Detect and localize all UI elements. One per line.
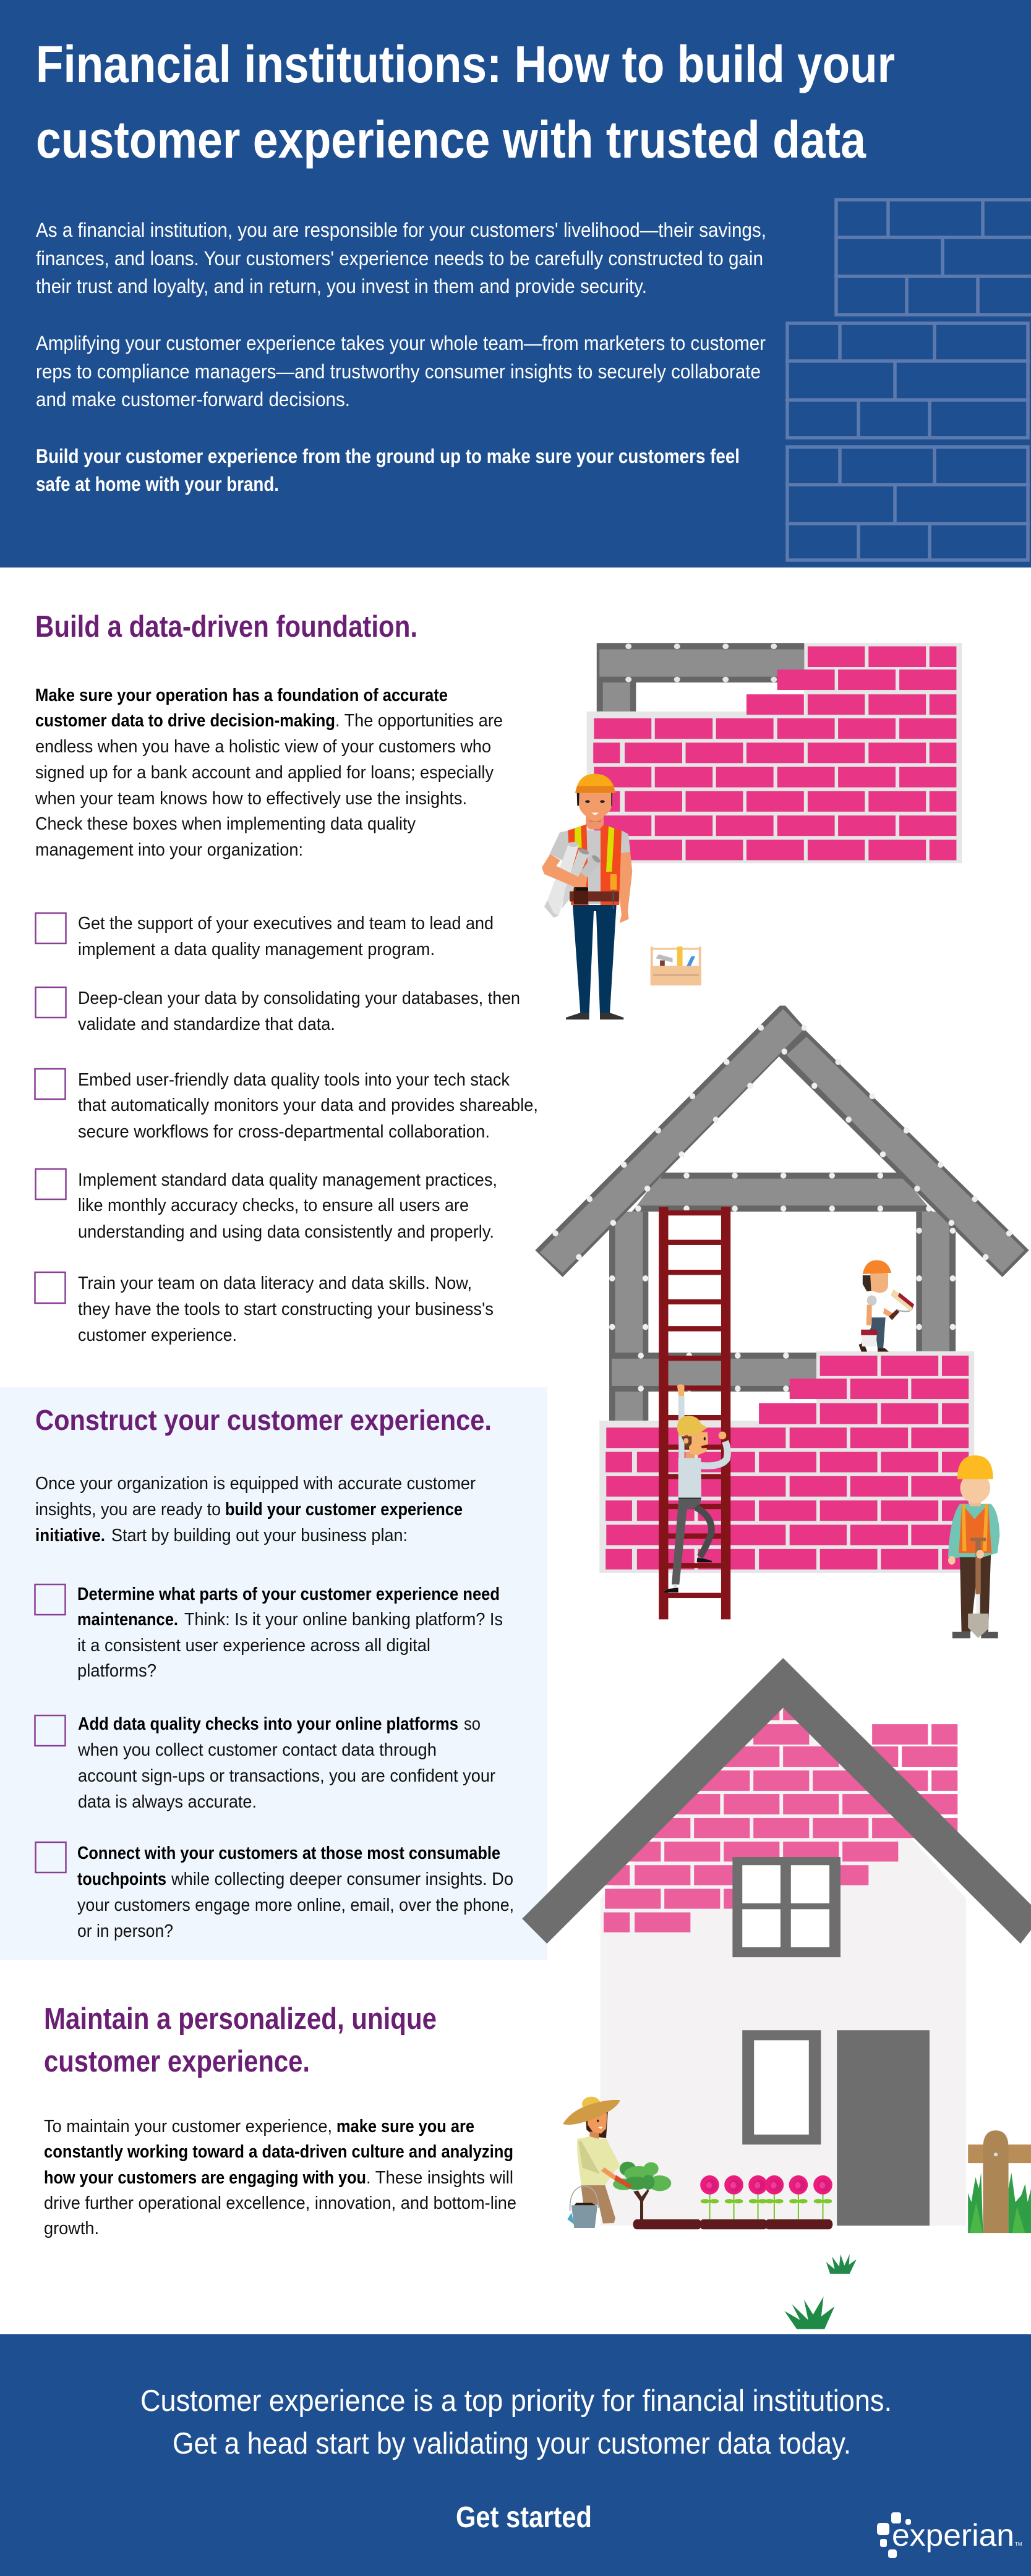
foundation body text: signed up for a bank account and applied for loans; especially [35,763,494,783]
checklist item 5: they have the tools to start constructing your business's [78,1299,494,1319]
construct body text: build your customer experience [225,1500,463,1520]
intro bold statement [36,445,740,495]
flower bed [633,2175,832,2229]
checklist item 1: implement a data quality management program. [78,940,435,959]
plan item 3: or in person? [77,1921,173,1941]
illustration: house frame under construction [535,1006,1029,1638]
checklist item 3: secure workflows for cross-departmental collaboration. [78,1122,490,1142]
intro paragraph 2: and make customer-forward decisions. [36,388,350,410]
intro paragraph 1 [36,219,766,297]
illustration: finished house [522,1658,1031,2329]
checklist item 1: Get the support of your executives and team to lead and [78,914,494,933]
intro paragraph 2: reps to compliance managers—and trustworthy consumer insights to securely collaborate [36,360,761,383]
intro paragraph 2 [36,332,766,410]
brick patch [604,1709,957,1932]
intro paragraph 1: their trust and loyalty, and in return, you invest in them and provide security. [36,275,647,297]
plan item 3: your customers engage more online, email, over the phone, [77,1895,514,1915]
plan item 3: touchpoints [77,1869,166,1889]
checklist item 1 [36,913,494,959]
plan item 2 [35,1714,495,1812]
intro paragraph 2: Amplifying your customer experience takes your whole team—from marketers to customer [36,332,766,354]
construct body text: Once your organization is equipped with accurate customer [35,1474,476,1494]
checklist item 4 [36,1169,497,1242]
intro paragraph 1: As a financial institution, you are responsible for your customers' livelihood—their savings, [36,219,766,241]
foundation body text: . The opportunities are [335,711,503,731]
plan item 3: while collecting deeper consumer insights. Do [171,1869,513,1889]
foreman with shovel [948,1455,999,1638]
title [36,35,895,169]
construct body text: Start by building out your business plan: [111,1526,408,1545]
maintain body text: growth. [44,2219,99,2238]
checklist item 3: Embed user-friendly data quality tools into your tech stack [78,1070,510,1090]
construct body text: initiative. [35,1526,105,1545]
rivets [552,1025,1012,1392]
section: build a data-driven foundation [35,610,538,1345]
heading: Build a data-driven foundation. [35,610,417,644]
painter worker [858,1260,914,1352]
foundation body text: customer data to drive decision-making [35,711,335,731]
call to action text: Get a head start by validating your customer data today. [173,2427,851,2460]
section: maintain [44,2002,516,2238]
checklist item 2: Deep-clean your data by consolidating your databases, then [78,988,520,1008]
icon: brick outline wall [785,200,1031,560]
plan item 1: platforms? [77,1661,156,1681]
foundation body text: management into your organization: [35,840,303,860]
call to action text: Customer experience is a top priority for financial institutions. [140,2384,892,2418]
maintain body text: drive further operational excellence, innovation, and bottom-line [44,2193,516,2213]
upper window [732,1857,841,1957]
checklist item 3: that automatically monitors your data and provides shareable, [78,1095,538,1115]
maintain body text: make sure you are [336,2117,474,2136]
checklist item 5: customer experience. [78,1325,237,1345]
plan item 2: so [464,1714,481,1734]
gardener with shrub [563,2097,671,2228]
illustration: foundation wall [587,643,962,985]
plan item 1 [35,1584,503,1681]
checklist item 3 [35,1069,538,1142]
checklist item 2: validate and standardize that data. [78,1014,335,1034]
checklist item 5 [35,1272,494,1345]
intro paragraph 1: finances, and loans. Your customers' experience needs to be carefully constructed to gain [36,247,763,270]
house wall [601,1699,966,2225]
worker with blueprints [542,774,632,1019]
logo: experian: experian [892,2518,1014,2553]
construct body text: insights, you are ready to [35,1500,221,1520]
call to action text [140,2384,892,2460]
plan item 2: data is always accurate. [78,1792,257,1812]
section: construct your customer experience [35,1404,514,1941]
large grass [784,2297,834,2329]
checklist item 4: like monthly accuracy checks, to ensure all users are [78,1196,469,1215]
foundation body text: Make sure your operation has a foundation of accurate [35,686,448,705]
title: customer experience with trusted data [36,111,866,169]
foundation body text: Check these boxes when implementing data quality [35,814,416,834]
pink brick wall [599,1351,974,1573]
steel frame [535,1006,1029,1421]
maintain body text [44,2117,516,2238]
logo: experian [877,2512,1022,2558]
woman in sun hat [563,2097,632,2228]
plan item 3 [36,1842,514,1941]
maintain body text: . These insights will [366,2168,513,2188]
small grass [826,2255,857,2274]
construct body text [35,1474,476,1545]
plan item 1: Think: Is it your online banking platform? Is [184,1610,503,1630]
checklist item 5: Train your team on data literacy and data skills. Now, [78,1273,472,1293]
plan item 1: Determine what parts of your customer experience need [77,1584,500,1604]
heading: Maintain a personalized, unique [44,2002,437,2036]
header panel [0,0,1031,567]
maintain body text: how your customers are engaging with you [44,2168,366,2188]
lower window [742,2030,821,2145]
heading: Construct your customer experience. [35,1404,492,1436]
maintain body text: constantly working toward a data-driven culture and analyzing [44,2142,513,2162]
red ladder [659,1207,730,1619]
checklist item 4: Implement standard data quality management practices, [78,1170,497,1190]
fence post with grass [968,2130,1031,2233]
checklist item 2 [36,987,520,1034]
get started link: Get started [456,2501,592,2534]
door [837,2030,930,2225]
plan item 1: it a consistent user experience across all digital [77,1636,430,1656]
foundation body text: when your team knows how to effectively use the insights. [35,789,467,809]
title: Financial institutions: How to build your [36,35,895,93]
icon: toolbox [651,946,701,985]
checklist item 4: understanding and using data consistently and properly. [78,1222,494,1242]
roof [522,1658,1031,1944]
heading [44,2002,437,2078]
foundation body text: endless when you have a holistic view of your customers who [35,737,491,757]
foundation body text [35,686,503,860]
intro bold statement: Build your customer experience from the ground up to make sure your customers feel [36,445,740,467]
plan item 2: account sign-ups or transactions, you are confident your [78,1766,495,1786]
pink brick wall [587,643,962,863]
steel beam frame [597,643,804,712]
intro bold statement: safe at home with your brand. [36,473,279,495]
plan item 3: Connect with your customers at those most consumable [77,1843,500,1863]
footer panel [0,2334,1031,2576]
logo: experian: TM [1015,2541,1022,2547]
shrub [613,2162,671,2220]
panel: construct background [0,1387,547,1960]
plan item 1: maintenance. [77,1610,178,1630]
heading: customer experience. [44,2045,310,2078]
climbing worker [663,1384,727,1592]
maintain body text: To maintain your customer experience, [44,2117,332,2136]
plan item 2: Add data quality checks into your online platforms [78,1714,458,1734]
plan item 2: when you collect customer contact data through [77,1740,437,1760]
